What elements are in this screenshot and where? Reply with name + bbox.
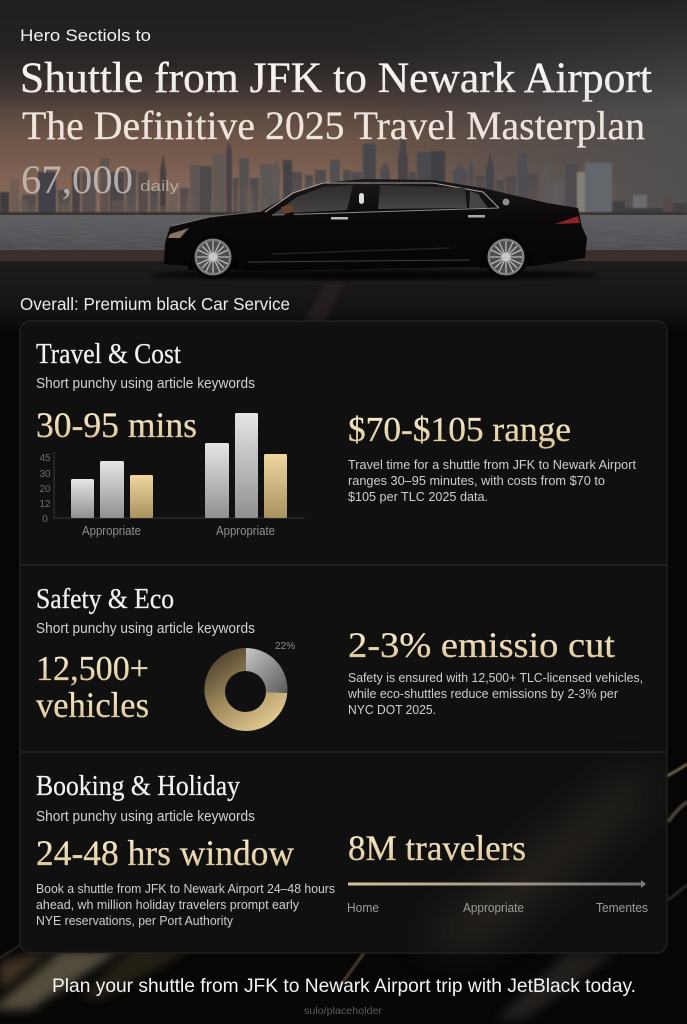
- bar chart: 45: [39, 453, 51, 464]
- skyline: [0, 96, 687, 216]
- bar chart: 30: [39, 469, 51, 480]
- panel: safety and eco: [36, 583, 643, 731]
- hero photo: skyline, water, road: [0, 0, 687, 333]
- description: Book a shuttle from JFK to Newark Airport 24–48 hours: [36, 881, 335, 896]
- subheading: Short punchy using article keywords: [36, 809, 255, 825]
- panel: travel and cost: [36, 338, 636, 538]
- bar chart: Appropriate: [82, 524, 141, 538]
- stat: emissions: 2-3% emissio cut: [348, 625, 615, 665]
- stat: price range: $70-$105 range: [348, 410, 571, 449]
- stat: 12,500+ vehicles: vehicles: [36, 685, 149, 725]
- description: $105 per TLC 2025 data.: [348, 489, 488, 504]
- background: gold light streaks: [0, 764, 687, 1020]
- section label: Overall: Premium black Car Service: [20, 294, 290, 314]
- main title: Shuttle from JFK to Newark Airport: [20, 55, 652, 102]
- subheading: Short punchy using article keywords: [36, 376, 255, 392]
- donut chart: [204, 641, 295, 731]
- arrow timeline: Tementes: [596, 900, 648, 915]
- bar chart: 12: [39, 499, 51, 510]
- heading: Safety & Eco: [36, 583, 174, 615]
- description: [36, 881, 335, 928]
- bar chart: 0: [42, 514, 48, 525]
- hero stat: 67,000 daily: daily: [140, 178, 180, 195]
- bar chart: 20: [39, 484, 51, 495]
- description: Safety is ensured with 12,500+ TLC-licensed vehicles,: [348, 670, 643, 685]
- limousine: [150, 179, 600, 280]
- call to action: Plan your shuttle from JFK to Newark Airport trip with JetBlack today.: [52, 975, 636, 997]
- main panel: [20, 321, 667, 953]
- description: while eco-shuttles reduce emissions by 2-3% per: [347, 686, 619, 701]
- description: ahead, wh million holiday travelers prompt early: [36, 897, 300, 912]
- description: NYC DOT 2025.: [348, 702, 436, 717]
- arrow timeline: Home: [347, 900, 379, 915]
- subheading: Short punchy using article keywords: [36, 621, 255, 637]
- stat: 12,500+ vehicles: [36, 649, 149, 725]
- stat: 30-95 mins: 30-95 mins: [36, 405, 197, 445]
- description: [348, 457, 636, 504]
- panel: booking and holiday: [36, 770, 648, 928]
- hero eyebrow: Hero Sectiols to: [20, 26, 151, 45]
- description: NYE reservations, per Port Authority: [36, 913, 234, 928]
- stat: 12,500+ vehicles: 12,500+: [36, 649, 149, 688]
- footer placeholder: sulo/placeholder: [304, 1005, 383, 1017]
- heading: Travel & Cost: [36, 338, 181, 370]
- lower skyline band: [14, 190, 268, 216]
- stat: 8M travelers: 8M travelers: [348, 828, 526, 868]
- arrow timeline: [347, 880, 648, 915]
- stat: booking window: 24-48 hrs window: [36, 833, 294, 873]
- arrow timeline: Appropriate: [463, 900, 524, 915]
- donut chart: 22%: [275, 641, 295, 652]
- bar chart: Appropriate: [216, 524, 275, 538]
- hero stat: 67,000 daily: 67,000: [21, 157, 133, 202]
- heading: Booking & Holiday: [36, 770, 240, 802]
- description: [347, 670, 643, 717]
- hero stat: 67,000 daily: [21, 157, 180, 202]
- subtitle: The Definitive 2025 Travel Masterplan: [22, 103, 645, 148]
- bar chart: [39, 413, 305, 538]
- description: Travel time for a shuttle from JFK to Newark Airport: [348, 457, 636, 472]
- description: ranges 30–95 minutes, with costs from $70 to: [348, 473, 605, 488]
